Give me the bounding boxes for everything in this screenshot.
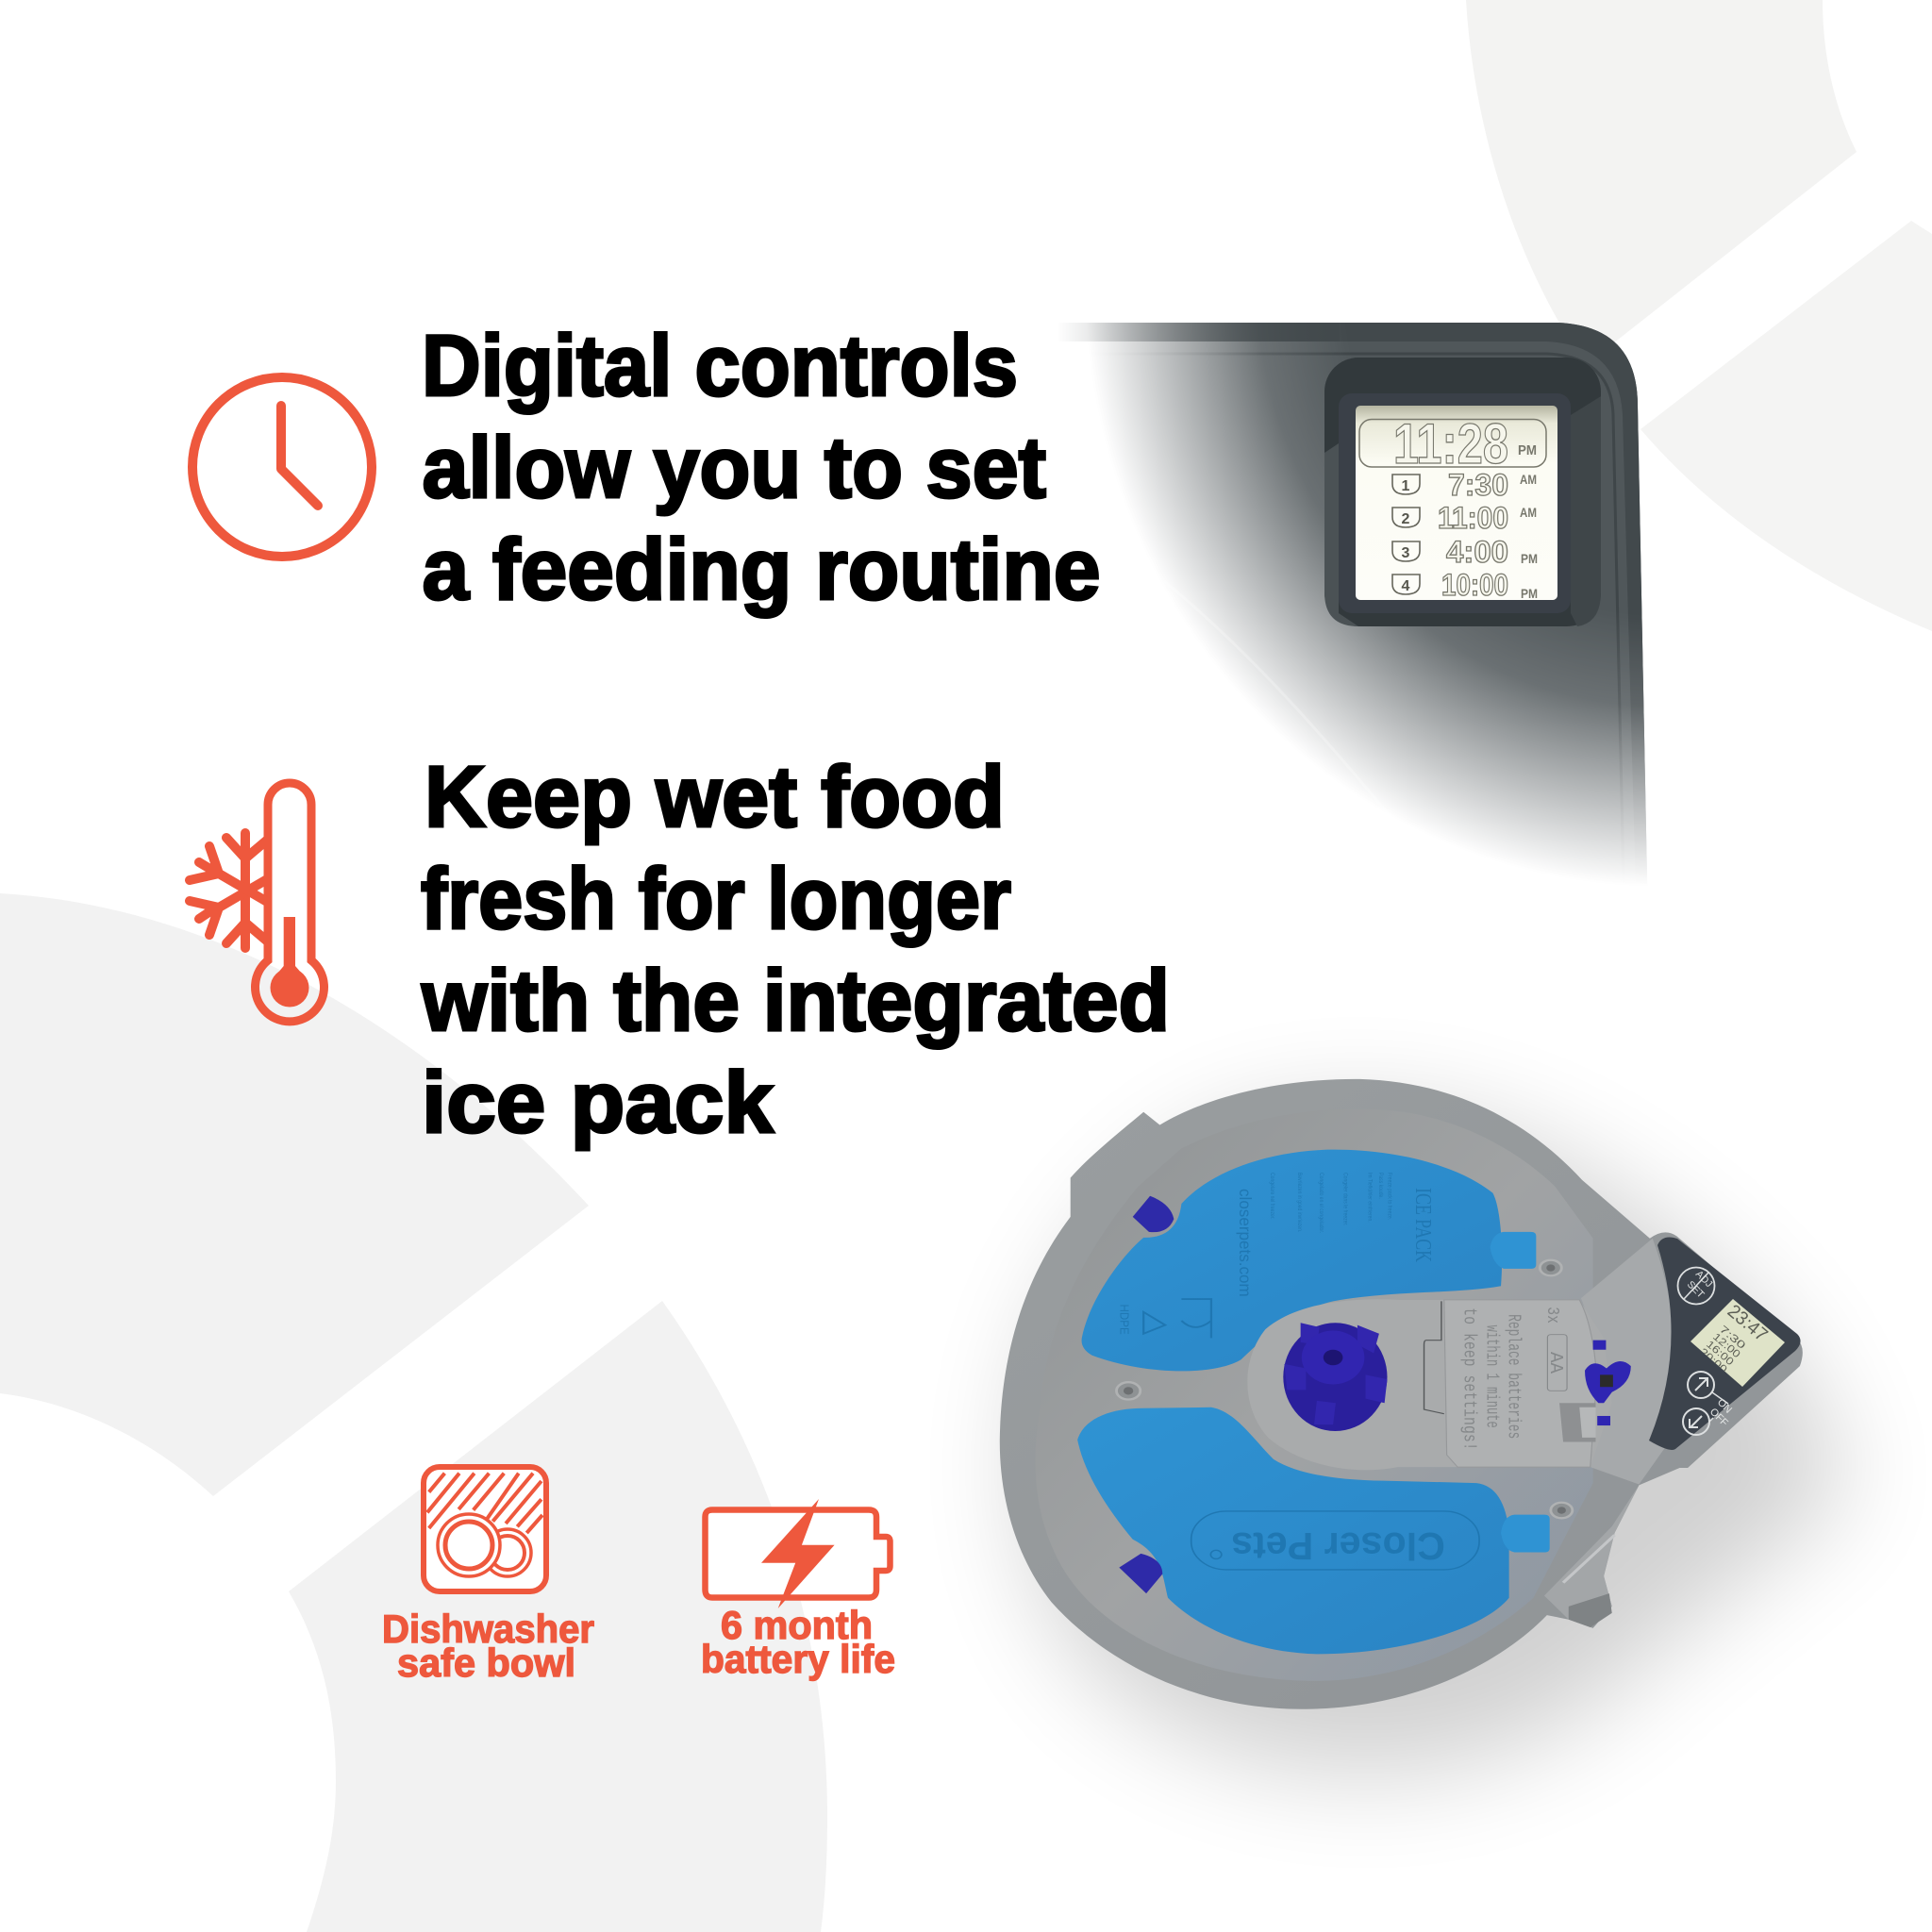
icon: battery: [706, 1499, 891, 1608]
heading: keep wet food fresh: Keep wet food: [425, 749, 1005, 845]
lcd screen: PM: [1521, 551, 1538, 566]
mini lcd: 7:30: [1717, 1324, 1747, 1352]
lcd screen: 7:30: [1448, 468, 1508, 502]
lcd screen: 2: [1402, 511, 1410, 527]
label: battery life: [701, 1603, 895, 1681]
adj set button: SET: [1685, 1279, 1707, 1301]
ice pack top: Bevriezen in goed invriezen.: [1296, 1173, 1302, 1233]
centre hub and battery cover: Replace batteries: [1503, 1314, 1524, 1439]
heading: digital controls: Digital controls: [422, 318, 1018, 414]
ice pack top: HDPE: [1117, 1305, 1129, 1335]
ice pack top: Im Tiefkühler einfrieren.: [1366, 1173, 1373, 1223]
mini lcd: 12:00: [1710, 1331, 1742, 1360]
ice pack bottom: Closer Pets: [1231, 1524, 1445, 1567]
lcd screen: [1356, 406, 1557, 602]
icon: thermometer with snowflake: [190, 783, 324, 1022]
ice pack top: closerpets.com: [1235, 1189, 1253, 1297]
product: feeder base with ice packs: [1000, 1079, 1803, 1709]
bowl drop shadow: [1024, 1111, 1849, 1774]
heading: keep wet food fresh: fresh for longer: [421, 851, 1011, 947]
lcd screen: PM: [1521, 586, 1538, 601]
lcd screen: 1: [1402, 478, 1410, 494]
background shape: right arc: [1641, 221, 1932, 631]
lcd screen: 10:00: [1441, 568, 1508, 602]
blue spindle: [1283, 1323, 1387, 1431]
heading: digital controls: [422, 318, 1100, 618]
control neck: [1581, 1239, 1675, 1484]
bowl inner floor: [1036, 1109, 1593, 1681]
ice pack top: [1082, 1150, 1536, 1371]
lower right rim panel: [1544, 1485, 1639, 1620]
label: battery life: battery life: [701, 1637, 895, 1681]
ice pack top: Freeze pack to freeze.: [1386, 1173, 1392, 1220]
display recess: [1324, 358, 1601, 626]
ice pack top: Congeler dans le freezer.: [1341, 1173, 1348, 1226]
heading: digital controls: a feeding routine: [423, 522, 1100, 618]
centre hub and battery cover: AA: [1544, 1352, 1565, 1374]
lcd screen: 11:28: [1393, 412, 1508, 475]
background shape: left arc: [0, 893, 589, 1496]
control panel: ON: [1715, 1397, 1734, 1416]
background shape: bottom left arc: [289, 1301, 827, 1932]
ice pack top: Pass koude.: [1377, 1173, 1383, 1199]
arrow buttons: [1683, 1372, 1728, 1435]
lcd screen: 3: [1402, 545, 1410, 561]
label: dishwasher safe bowl: safe bowl: [397, 1641, 575, 1685]
heading: keep wet food fresh: [421, 749, 1170, 1151]
top rim fade: [1057, 323, 1340, 341]
adj set button: ADJ: [1693, 1269, 1714, 1290]
bowl outer shell: [1000, 1079, 1803, 1709]
mini lcd: 16:00: [1704, 1339, 1736, 1368]
label: dishwasher safe bowl: [382, 1607, 594, 1685]
blue clips: [1133, 1196, 1174, 1232]
screw posts: [1117, 1260, 1573, 1518]
adj set button: [1677, 1268, 1715, 1304]
ice pack top: Congelado en el congelador.: [1318, 1173, 1324, 1234]
centre hub and battery cover: 3x: [1542, 1307, 1562, 1324]
mini lcd: [1690, 1299, 1785, 1387]
centre hub and battery cover: within 1 minute: [1481, 1325, 1502, 1428]
lcd screen: AM: [1520, 472, 1537, 487]
label: dishwasher safe bowl: Dishwasher: [382, 1607, 594, 1651]
control panel: [1649, 1238, 1801, 1450]
lcd screen: 4: [1402, 578, 1410, 594]
label: battery life: 6 month: [721, 1603, 873, 1647]
display bezel: [1339, 393, 1571, 613]
icon: clock: [192, 377, 372, 557]
heading: keep wet food fresh: with the integrated: [421, 953, 1170, 1049]
ice pack top: ICE PACK: [1410, 1188, 1436, 1262]
control panel: OFF: [1707, 1407, 1730, 1429]
device body: [1098, 323, 1647, 875]
icon: dishwasher safe bowl: [424, 1467, 546, 1591]
mini lcd: 23:47: [1724, 1301, 1772, 1346]
heading: digital controls: allow you to set: [423, 420, 1046, 516]
ice pack top: Congelare nel freezer.: [1269, 1173, 1275, 1220]
lcd screen: PM: [1518, 442, 1537, 458]
background shape: top right arc: [1466, 0, 1857, 343]
centre hub and battery cover: [1247, 1299, 1612, 1470]
lcd screen: AM: [1520, 505, 1537, 520]
lcd screen: 4:00: [1446, 535, 1508, 569]
lcd screen: 11:00: [1438, 501, 1508, 535]
ice pack bottom: [1077, 1407, 1550, 1654]
mini lcd: 20:00: [1697, 1346, 1729, 1375]
centre hub and battery cover: to keep settings!: [1458, 1307, 1479, 1451]
panel photo: digital display close-up: [1069, 323, 1647, 877]
heading: keep wet food fresh: ice pack: [422, 1055, 774, 1151]
